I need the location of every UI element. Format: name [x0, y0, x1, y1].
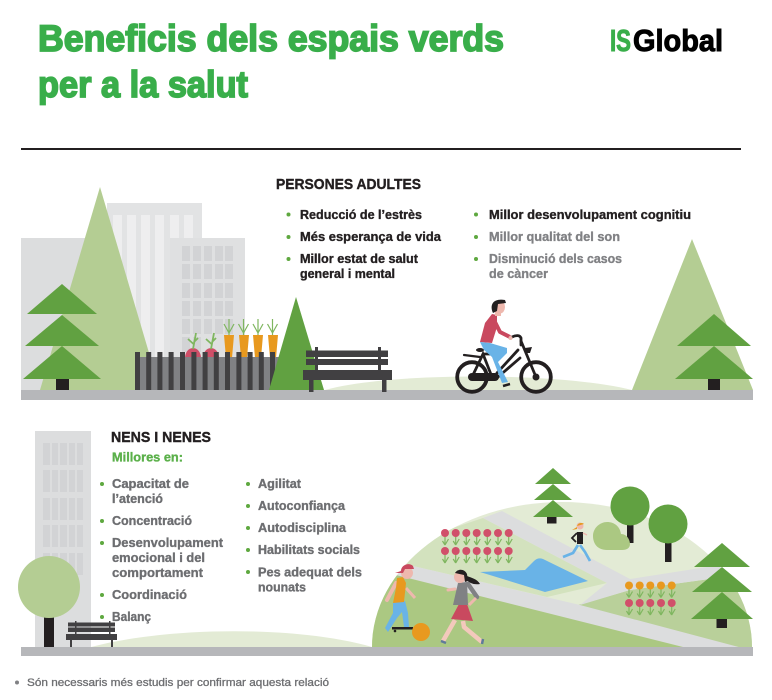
pale tree right — [632, 239, 753, 390]
list: adults benefits column 2: Millor qualitat del son — [489, 229, 620, 244]
pond — [480, 558, 588, 592]
logo: ISGlobal: Global — [633, 23, 723, 58]
list: children column 1: Capacitat de — [112, 476, 189, 491]
runner — [563, 522, 590, 561]
bench children — [66, 621, 117, 647]
subheading: Millores en: Millores en: — [112, 450, 183, 464]
panel: children scene — [18, 431, 760, 660]
title: Beneficis dels espais verds — [38, 18, 504, 59]
list: adults benefits column 2: de càncer — [489, 266, 548, 281]
ground adults — [21, 390, 753, 400]
flower beds — [441, 529, 676, 615]
panel: adults scene — [21, 187, 753, 400]
round tree — [18, 556, 80, 647]
large pale tree left — [40, 187, 160, 390]
list: children column 1: Concentració — [112, 513, 192, 528]
small pine — [533, 468, 573, 524]
footnote: Són necessaris més estudis per confirmar aquesta relació — [27, 677, 329, 689]
tall building — [35, 431, 91, 647]
list: children column 2: Autodisciplina — [258, 520, 347, 535]
list: children column 1: Desenvolupament — [112, 535, 224, 550]
list: adults benefits column 1 — [286, 207, 442, 281]
vegetables — [185, 319, 278, 358]
bench adults — [303, 347, 392, 392]
bush — [593, 522, 630, 550]
heading: children: NENS I NENES — [111, 429, 211, 446]
dark tree left — [23, 284, 101, 390]
list: adults benefits column 2 — [474, 207, 691, 281]
low hill — [325, 376, 632, 390]
list: children column 1 — [100, 476, 224, 624]
mid tree — [269, 297, 324, 390]
girl — [441, 570, 483, 644]
list: children column 2: Habilitats socials — [258, 542, 360, 557]
header rule — [21, 148, 741, 150]
low hill — [91, 631, 372, 647]
list: adults benefits column 1: Reducció de l’estrès — [300, 207, 422, 222]
list: children column 1: l’atenció — [112, 491, 163, 506]
logo: ISGlobal: IS — [610, 23, 631, 58]
park dome — [372, 502, 752, 647]
cyclist — [457, 300, 551, 392]
heading: adults: PERSONES ADULTES — [276, 176, 421, 193]
list: adults benefits column 1: Més esperança de vida — [300, 229, 442, 244]
round trees — [610, 486, 688, 562]
title: per a la salut — [38, 64, 248, 105]
list: children column 1: emocional i del — [112, 550, 205, 565]
list: adults benefits column 2: Millor desenvolupament cognitiu — [489, 207, 691, 222]
list: children column 2: Agilitat — [258, 476, 302, 491]
large pine — [691, 543, 753, 628]
dark tree right — [675, 314, 753, 390]
ground children — [21, 647, 753, 656]
buildings — [21, 203, 245, 390]
list: children column 2: Pes adequat dels — [258, 564, 362, 580]
list: children column 2: nounats — [258, 580, 306, 594]
ball — [412, 623, 430, 641]
title — [38, 18, 504, 105]
list: children column 1: comportament — [112, 565, 204, 580]
list: children column 2: Autoconfiança — [258, 498, 346, 513]
list: children column 2 — [246, 476, 362, 594]
boy on skateboard — [385, 564, 415, 632]
list: adults benefits column 1: general i mental — [300, 266, 395, 281]
fence — [135, 352, 279, 390]
list: adults benefits column 1: Millor estat de salut — [300, 251, 419, 266]
list: children column 1: Coordinació — [112, 587, 187, 602]
list: children column 1: Balanç — [112, 609, 151, 624]
list: adults benefits column 2: Disminució dels casos — [489, 251, 622, 266]
